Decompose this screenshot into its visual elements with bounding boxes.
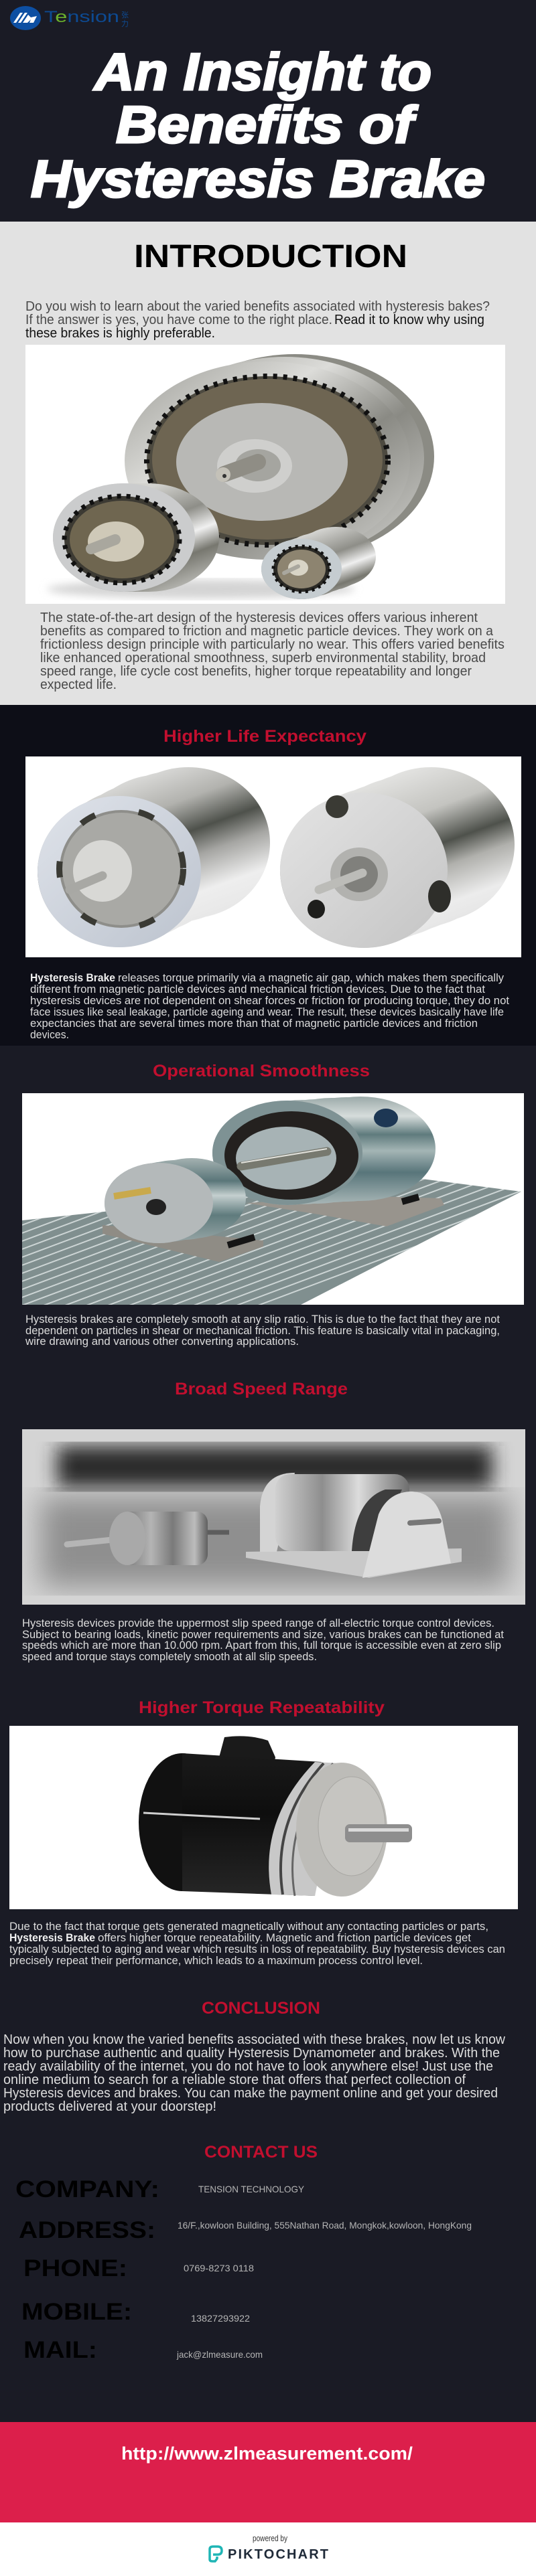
text block: intro question: these brakes is highly preferable. xyxy=(25,326,215,341)
title xyxy=(31,42,485,208)
text block: life expectancy: Hysteresis Brake xyxy=(30,971,115,984)
icon: Tension logo: 力 xyxy=(121,19,129,28)
panel: higher life expectancy xyxy=(0,705,536,1046)
heading: higher life expectancy: Higher Life Expectancy xyxy=(163,727,366,746)
panel: website banner: http://www.zlmeasurement.com/ xyxy=(121,2443,413,2464)
text block: torque repeatability: typically subjected to aging and wear which results in loss of repeatability. Buy hysteresis devices can xyxy=(9,1943,505,1955)
icon: Tension logo: Tension xyxy=(44,8,119,26)
text block: conclusion xyxy=(3,2032,506,2114)
text: piktochart: PIKTOCHART xyxy=(228,2547,328,2562)
text block: speed range: Subject to bearing loads, kinetic power requirements and size, various brakes can be functioned at xyxy=(22,1628,504,1641)
contact: phone: PHONE: xyxy=(23,2255,127,2281)
text block: conclusion: online medium to search for a reliable store that offers that perfect collection of xyxy=(3,2073,466,2087)
contact: company: TENSION TECHNOLOGY xyxy=(198,2184,305,2194)
text block: life expectancy: devices. xyxy=(30,1028,69,1041)
panel: footer xyxy=(0,2522,536,2576)
image: black and white brake photo xyxy=(22,1429,525,1605)
contact: mail xyxy=(23,2337,263,2363)
panel: main dark background xyxy=(0,1046,536,2422)
title: Hysteresis Brake xyxy=(31,149,485,208)
panel: website banner xyxy=(0,2422,536,2522)
text block: intro question: Do you wish to learn about the varied benefits associated with hysteresis bakes? xyxy=(25,299,490,314)
contact: company: COMPANY: xyxy=(15,2176,159,2202)
text block: intro question: If the answer is yes, you have come to the right place. xyxy=(25,313,332,327)
contact: mail: MAIL: xyxy=(23,2337,97,2363)
text block: life expectancy xyxy=(30,971,509,1041)
contact: mobile xyxy=(21,2299,250,2325)
icon: Tension logo: 张 xyxy=(121,11,129,19)
text block: torque repeatability: Due to the fact that torque gets generated magnetically without any contacting particles or parts, xyxy=(9,1920,488,1933)
text block: conclusion: Now when you know the varied benefits associated with these brakes, now let us know xyxy=(3,2032,506,2047)
icon: Tension logo xyxy=(10,6,129,30)
contact: address: 16/F.,kowloon Building, 555Nathan Road, Mongkok,kowloon, HongKong xyxy=(178,2220,472,2231)
heading: contact us: CONTACT US xyxy=(204,2143,318,2162)
text block: intro benefits: like enhanced operational smoothness, superb environmental stability, broad xyxy=(40,651,486,665)
text block: speed range: speed and torque stays completely smooth at all slip speeds. xyxy=(22,1650,317,1663)
image: brakes on rail plate xyxy=(22,1093,524,1305)
text block: conclusion: products delivered at your doorstep! xyxy=(3,2099,216,2114)
text block: smoothness xyxy=(25,1313,500,1348)
text block: smoothness: dependent on particles in shear or mechanical friction. This feature is basically vital in packaging, xyxy=(25,1324,500,1337)
heading: broad speed range: Broad Speed Range xyxy=(175,1380,348,1398)
text block: life expectancy: hysteresis devices are not dependent on shear forces or friction for producing torque, they do not xyxy=(30,994,509,1007)
heading: operational smoothness: Operational Smoothness xyxy=(153,1062,370,1080)
text block: intro benefits: speed range, life cycle cost benefits, higher torque repeatability and longer xyxy=(40,664,472,679)
text block: smoothness: wire drawing and various other converting applications. xyxy=(25,1335,299,1348)
text block: intro benefits xyxy=(40,611,505,692)
contact: phone: 0769-8273 0118 xyxy=(184,2263,254,2273)
text block: life expectancy: different from magnetic particle devices and mechanical friction devices. Due to the fact that xyxy=(30,983,485,995)
text block: torque repeatability: Hysteresis Brake xyxy=(9,1931,95,1944)
text block: conclusion: ready availability of the internet, you do not have to look anywhere else! Just use the xyxy=(3,2059,493,2074)
title: An Insight to xyxy=(93,42,431,101)
text block: torque repeatability: precisely repeat their performance, which leads to a maximum process control level. xyxy=(9,1954,423,1967)
contact: company xyxy=(15,2176,305,2202)
contact: mail: jack@zlmeasure.com xyxy=(176,2349,263,2360)
title: Benefits of xyxy=(116,95,419,154)
heading: conclusion: CONCLUSION xyxy=(202,1999,320,2018)
text block: conclusion: how to purchase authentic and quality Hysteresis Dynamometer and brakes. With the xyxy=(3,2046,500,2061)
text block: speed range: Hysteresis devices provide the uppermost slip speed range of all-electric torque control devices. xyxy=(22,1617,494,1629)
text block: intro benefits: benefits as compared to friction and magnetic particle devices. They work on a xyxy=(40,624,494,639)
text block: intro benefits: The state-of-the-art design of the hysteresis devices offers various inherent xyxy=(40,611,478,625)
icon: piktochart logo xyxy=(210,2547,222,2561)
contact: mobile: MOBILE: xyxy=(21,2299,132,2325)
text block: torque repeatability: offers higher torque repeatability. Magnetic and friction particle devices get xyxy=(98,1931,471,1944)
text block: speed range: speeds which are more than 10.000 rpm. Apart from this, full torque is accessible even at zero slip xyxy=(22,1639,501,1652)
text block: speed range xyxy=(22,1617,504,1663)
panel: introduction xyxy=(0,222,536,705)
text block: intro question xyxy=(25,299,490,341)
contact: address: ADDRESS: xyxy=(19,2217,155,2243)
contact: mobile: 13827293922 xyxy=(191,2313,250,2324)
text block: conclusion: Hysteresis devices and brakes. You can make the payment online and get your desired xyxy=(3,2086,498,2101)
image: three hysteresis brakes xyxy=(25,345,505,604)
text block: intro benefits: expected life. xyxy=(40,677,117,692)
text block: intro question: Read it to know why using xyxy=(334,313,484,327)
heading: introduction: INTRODUCTION xyxy=(134,239,407,274)
contact: phone xyxy=(23,2255,254,2281)
text block: life expectancy: releases torque primarily via a magnetic air gap, which makes them specifically xyxy=(118,971,504,984)
contact details xyxy=(15,2176,472,2363)
heading: higher torque repeatability: Higher Torque Repeatability xyxy=(139,1698,385,1717)
header background panel xyxy=(0,0,536,222)
text block: life expectancy: face issues like seal leakage, particle ageing and wear. The result, these devices basically have life xyxy=(30,1005,504,1018)
contact: address xyxy=(19,2217,472,2243)
text block: life expectancy: expectancies that are several times more than that of magnetic particle devices and friction xyxy=(30,1017,478,1030)
image: black cylinder brake xyxy=(9,1726,518,1909)
text block: smoothness: Hysteresis brakes are completely smooth at any slip ratio. This is due to the fact that they are not xyxy=(25,1313,500,1325)
text block: intro benefits: frictionless design principle with particularly no wear. This offers varied benefits xyxy=(40,637,505,652)
text: powered by: powered by xyxy=(253,2533,287,2543)
image: two silver brakes xyxy=(25,756,521,957)
text block: torque repeatability xyxy=(9,1920,505,1967)
